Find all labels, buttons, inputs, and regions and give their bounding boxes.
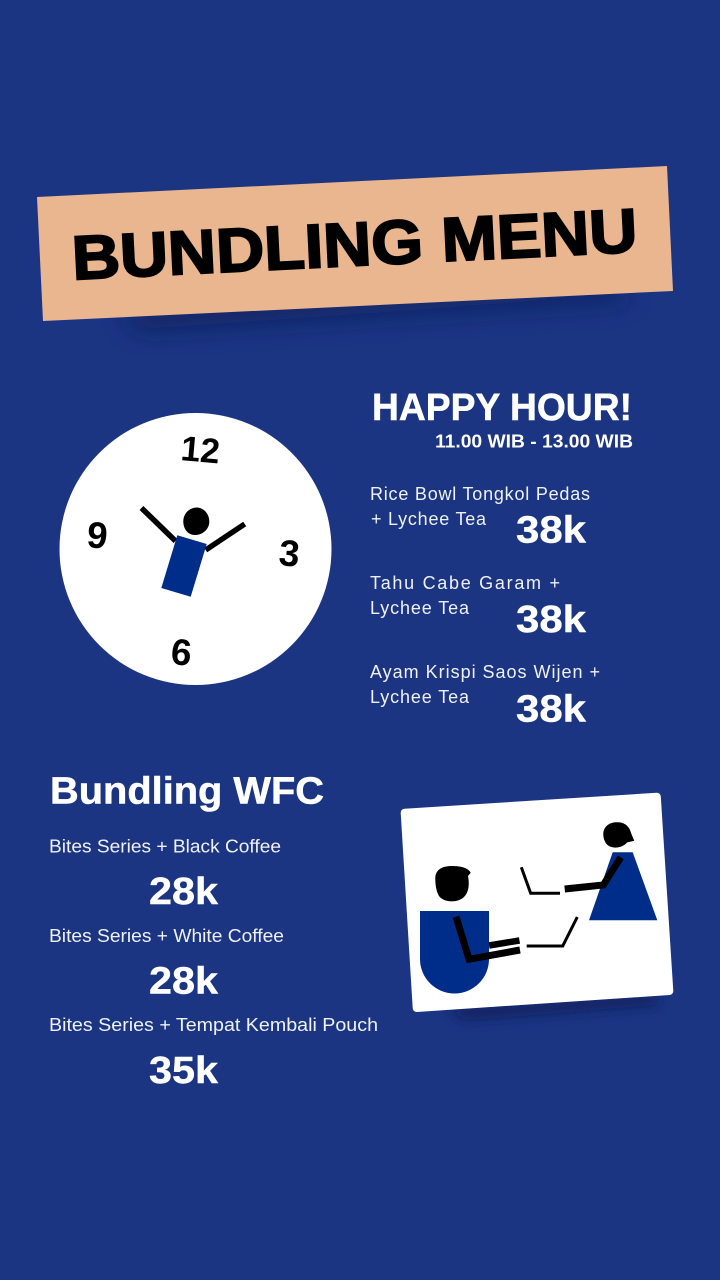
woman figure	[565, 822, 657, 920]
menu item 2	[370, 573, 587, 641]
wfc item 2: 28k	[149, 960, 219, 1002]
person with raised arms as clock hands	[142, 508, 245, 597]
clock numeral 3: 3	[277, 532, 301, 575]
clock numeral 6: 6	[169, 631, 193, 674]
menu item 2: 38k	[516, 599, 587, 641]
clock numeral 9: 9	[85, 514, 109, 557]
clock illustration	[60, 413, 332, 685]
happy hour heading: HAPPY HOUR!	[372, 387, 632, 429]
wfc item 2	[49, 926, 284, 1002]
wfc heading: Bundling WFC	[50, 770, 324, 812]
title: BUNDLING MENU	[70, 197, 639, 293]
wfc item 3: Bites Series + Tempat Kembali Pouch	[49, 1015, 378, 1035]
happy hour section	[370, 387, 633, 730]
work from cafe illustration card	[405, 797, 669, 1008]
card shadow	[445, 994, 660, 1020]
menu item 3: 38k	[516, 688, 587, 730]
wfc item 3	[49, 1015, 378, 1092]
menu item 3: Lychee Tea	[370, 687, 470, 707]
menu item 1	[370, 484, 590, 552]
menu item 2: Lychee Tea	[370, 598, 470, 618]
menu item 1: Rice Bowl Tongkol Pedas	[370, 484, 590, 504]
menu item 1: 38k	[516, 510, 587, 552]
menu item 2: Tahu Cabe Garam +	[370, 573, 560, 593]
title banner	[37, 166, 673, 321]
banner shadow	[120, 284, 630, 330]
menu item 1: + Lychee Tea	[371, 509, 487, 529]
wfc item 3: 35k	[149, 1050, 219, 1092]
laptop right	[527, 917, 577, 946]
laptop left	[521, 867, 560, 893]
wfc item 1: Bites Series + Black Coffee	[49, 836, 281, 856]
bundling wfc section	[49, 770, 378, 1092]
wfc item 1: 28k	[149, 871, 219, 913]
man figure	[420, 866, 520, 994]
wfc item 1	[49, 836, 281, 913]
menu item 3	[370, 662, 600, 730]
happy hour time: 11.00 WIB - 13.00 WIB	[435, 432, 633, 452]
wfc item 2: Bites Series + White Coffee	[49, 926, 284, 946]
clock numeral 12: 12	[179, 429, 221, 471]
menu item 3: Ayam Krispi Saos Wijen +	[370, 662, 600, 682]
